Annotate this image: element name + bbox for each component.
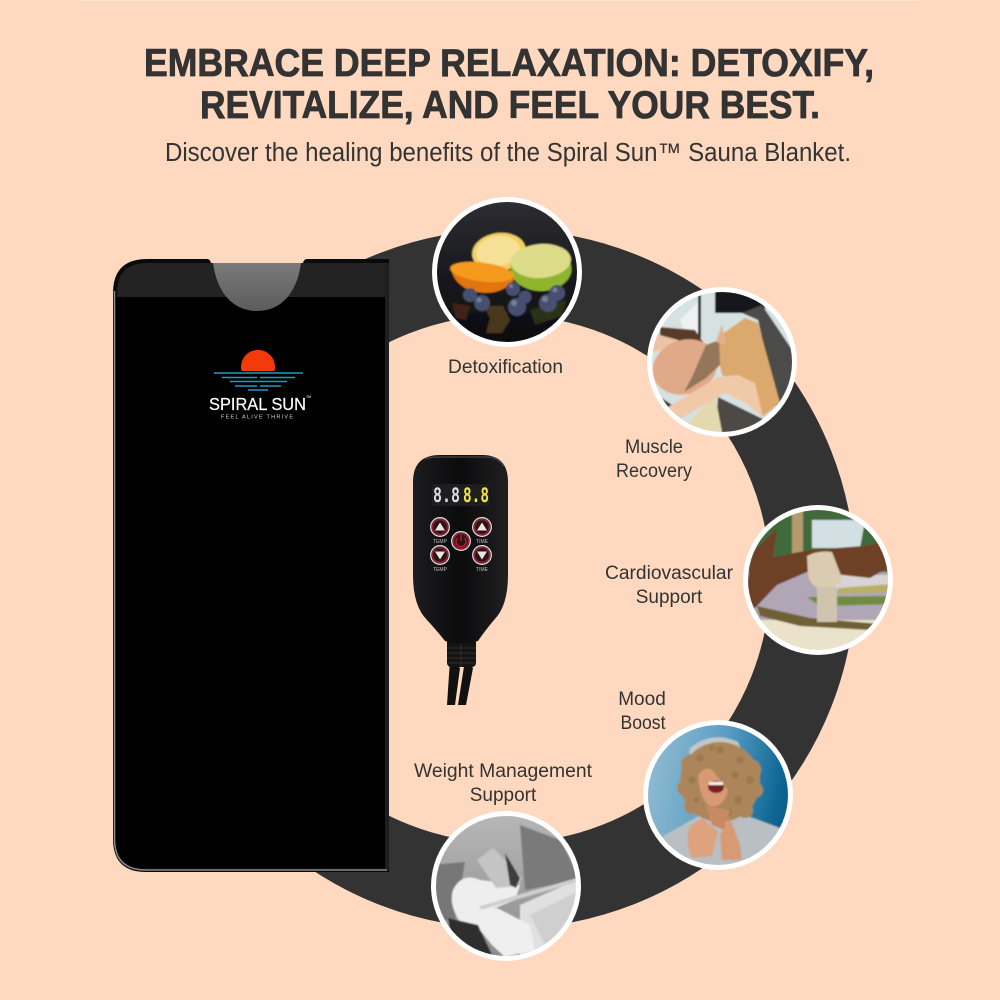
- label: cardiovascular support: [605, 563, 734, 608]
- button labels: [433, 539, 489, 573]
- subtitle: Discover the healing benefits of the Spiral Sun™ Sauna Blanket.: [165, 139, 851, 167]
- label: muscle recovery: Muscle: [625, 437, 683, 458]
- label: cardiovascular support: Support: [636, 587, 703, 608]
- photo: mood boost woman: [643, 720, 795, 870]
- top edge highlight: [80, 0, 920, 1]
- panel: sauna blanket: [113, 259, 389, 872]
- display: 8.8: [433, 484, 460, 507]
- label: muscle recovery: Recovery: [616, 461, 692, 482]
- button labels: TIME: [476, 567, 489, 573]
- button labels: TEMP: [433, 539, 448, 545]
- control buttons: [431, 518, 491, 564]
- label: weight management support: Weight Management: [414, 761, 593, 782]
- benefits ring: [199, 272, 813, 886]
- button labels: TIME: [476, 539, 489, 545]
- photo: muscle recovery massage: [640, 287, 797, 437]
- label: mood boost: Mood: [618, 689, 666, 710]
- title: REVITALIZE, AND FEEL YOUR BEST.: [200, 84, 820, 127]
- label: weight management support: Support: [470, 785, 537, 806]
- photo: detoxification fruit: [432, 197, 582, 347]
- label: muscle recovery: [616, 437, 692, 482]
- logo: Spiral Sun: SPIRAL SUN: [209, 394, 306, 414]
- logo: Spiral Sun: FEEL ALIVE THRIVE: [221, 414, 293, 420]
- display: 8.8: [463, 484, 489, 507]
- label: mood boost: Boost: [620, 713, 666, 734]
- button labels: TEMP: [433, 567, 448, 573]
- label: mood boost: [618, 689, 666, 734]
- label: cardiovascular support: Cardiovascular: [605, 563, 734, 584]
- display: [432, 484, 489, 507]
- icon: controller remote with cables: [413, 455, 508, 705]
- photo: cardiovascular support tree: [743, 505, 893, 660]
- logo: Spiral Sun: [209, 350, 311, 420]
- label: weight management support: [414, 761, 593, 806]
- logo: Spiral Sun: TM: [306, 395, 311, 399]
- photo: weight management measuring tape: [431, 811, 581, 961]
- title: EMBRACE DEEP RELAXATION: DETOXIFY,: [144, 42, 874, 85]
- title: [144, 42, 874, 127]
- label: detoxification: Detoxification: [448, 357, 563, 378]
